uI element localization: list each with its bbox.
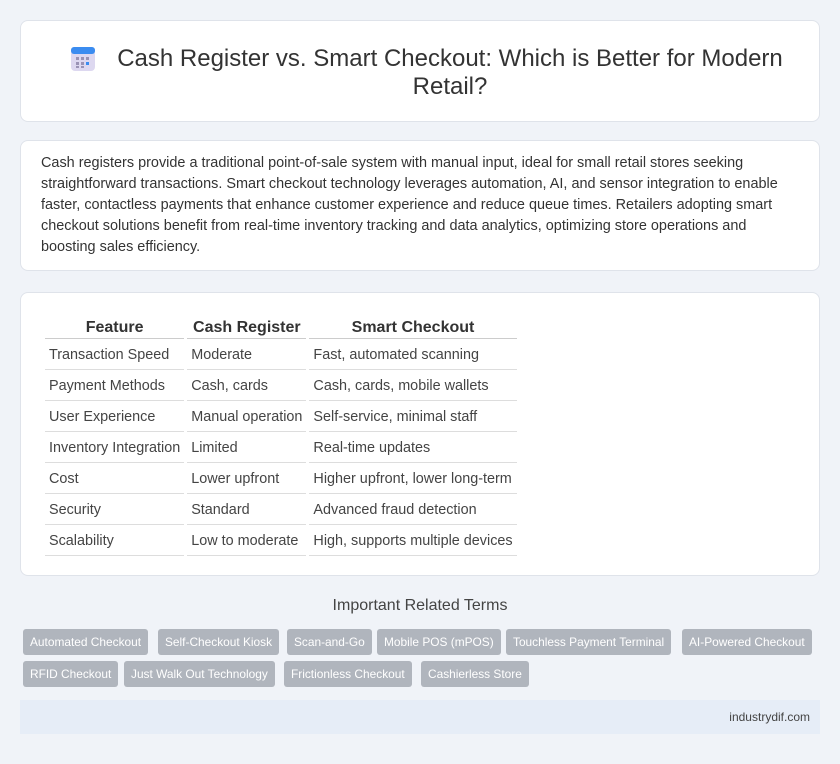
table: Lower upfront (191, 471, 279, 487)
table: Limited (191, 440, 238, 456)
table: Scalability (49, 533, 114, 549)
related terms tags: Frictionless Checkout (291, 667, 405, 681)
title: Cash Register vs. Smart Checkout: Which is Better for Modern Retail? (117, 45, 783, 100)
table: Cash Register (193, 318, 301, 336)
related terms tags: Mobile POS (mPOS) (384, 635, 494, 649)
table: Cost (49, 471, 79, 487)
table: Manual operation (191, 409, 302, 425)
related terms tags: Scan-and-Go (294, 635, 365, 649)
table: Smart Checkout (352, 318, 474, 336)
table: Real-time updates (313, 440, 430, 456)
footer (20, 700, 820, 734)
table: Fast, automated scanning (313, 347, 479, 363)
description card: Cash registers provide a traditional point-of-sale system with manual input, ideal for small retail stores seeking straightforward transactions. Smart checkout technology leverages automation, AI, and sensor integration to enable faster, contactless payments that enhance customer experience and reduce queue times. Retailers adopting smart checkout solutions benefit from real-time inventory tracking and data analytics, optimizing store operations and boosting sales efficiency. (41, 155, 778, 255)
related terms heading: Important Related Terms (333, 597, 507, 614)
table: Feature (86, 318, 144, 336)
table: Standard (191, 502, 250, 518)
table: Security (49, 502, 101, 518)
table: User Experience (49, 409, 155, 425)
table: Transaction Speed (49, 347, 169, 363)
table (45, 318, 517, 556)
table: Moderate (191, 347, 252, 363)
table: Cash, cards, mobile wallets (313, 378, 489, 394)
table: High, supports multiple devices (313, 533, 513, 549)
table: Inventory Integration (49, 440, 180, 456)
comparison table card (20, 292, 820, 576)
footer: industrydif.com (729, 710, 810, 724)
table: Low to moderate (191, 533, 298, 549)
related terms tags: Touchless Payment Terminal (513, 635, 664, 649)
related terms tags: Automated Checkout (30, 635, 141, 649)
table: Payment Methods (49, 378, 165, 394)
table: Cash, cards (191, 378, 268, 394)
table: Self-service, minimal staff (313, 409, 477, 425)
related terms tags: Self-Checkout Kiosk (165, 635, 272, 649)
related terms tags: RFID Checkout (30, 667, 111, 681)
related terms tags: Cashierless Store (428, 667, 522, 681)
icon: calendar (71, 47, 95, 71)
table: Higher upfront, lower long-term (313, 471, 512, 487)
header card (20, 20, 820, 122)
related terms tags (23, 629, 812, 687)
related terms tags: AI-Powered Checkout (689, 635, 805, 649)
related terms tags: Just Walk Out Technology (131, 667, 268, 681)
table: Advanced fraud detection (313, 502, 477, 518)
